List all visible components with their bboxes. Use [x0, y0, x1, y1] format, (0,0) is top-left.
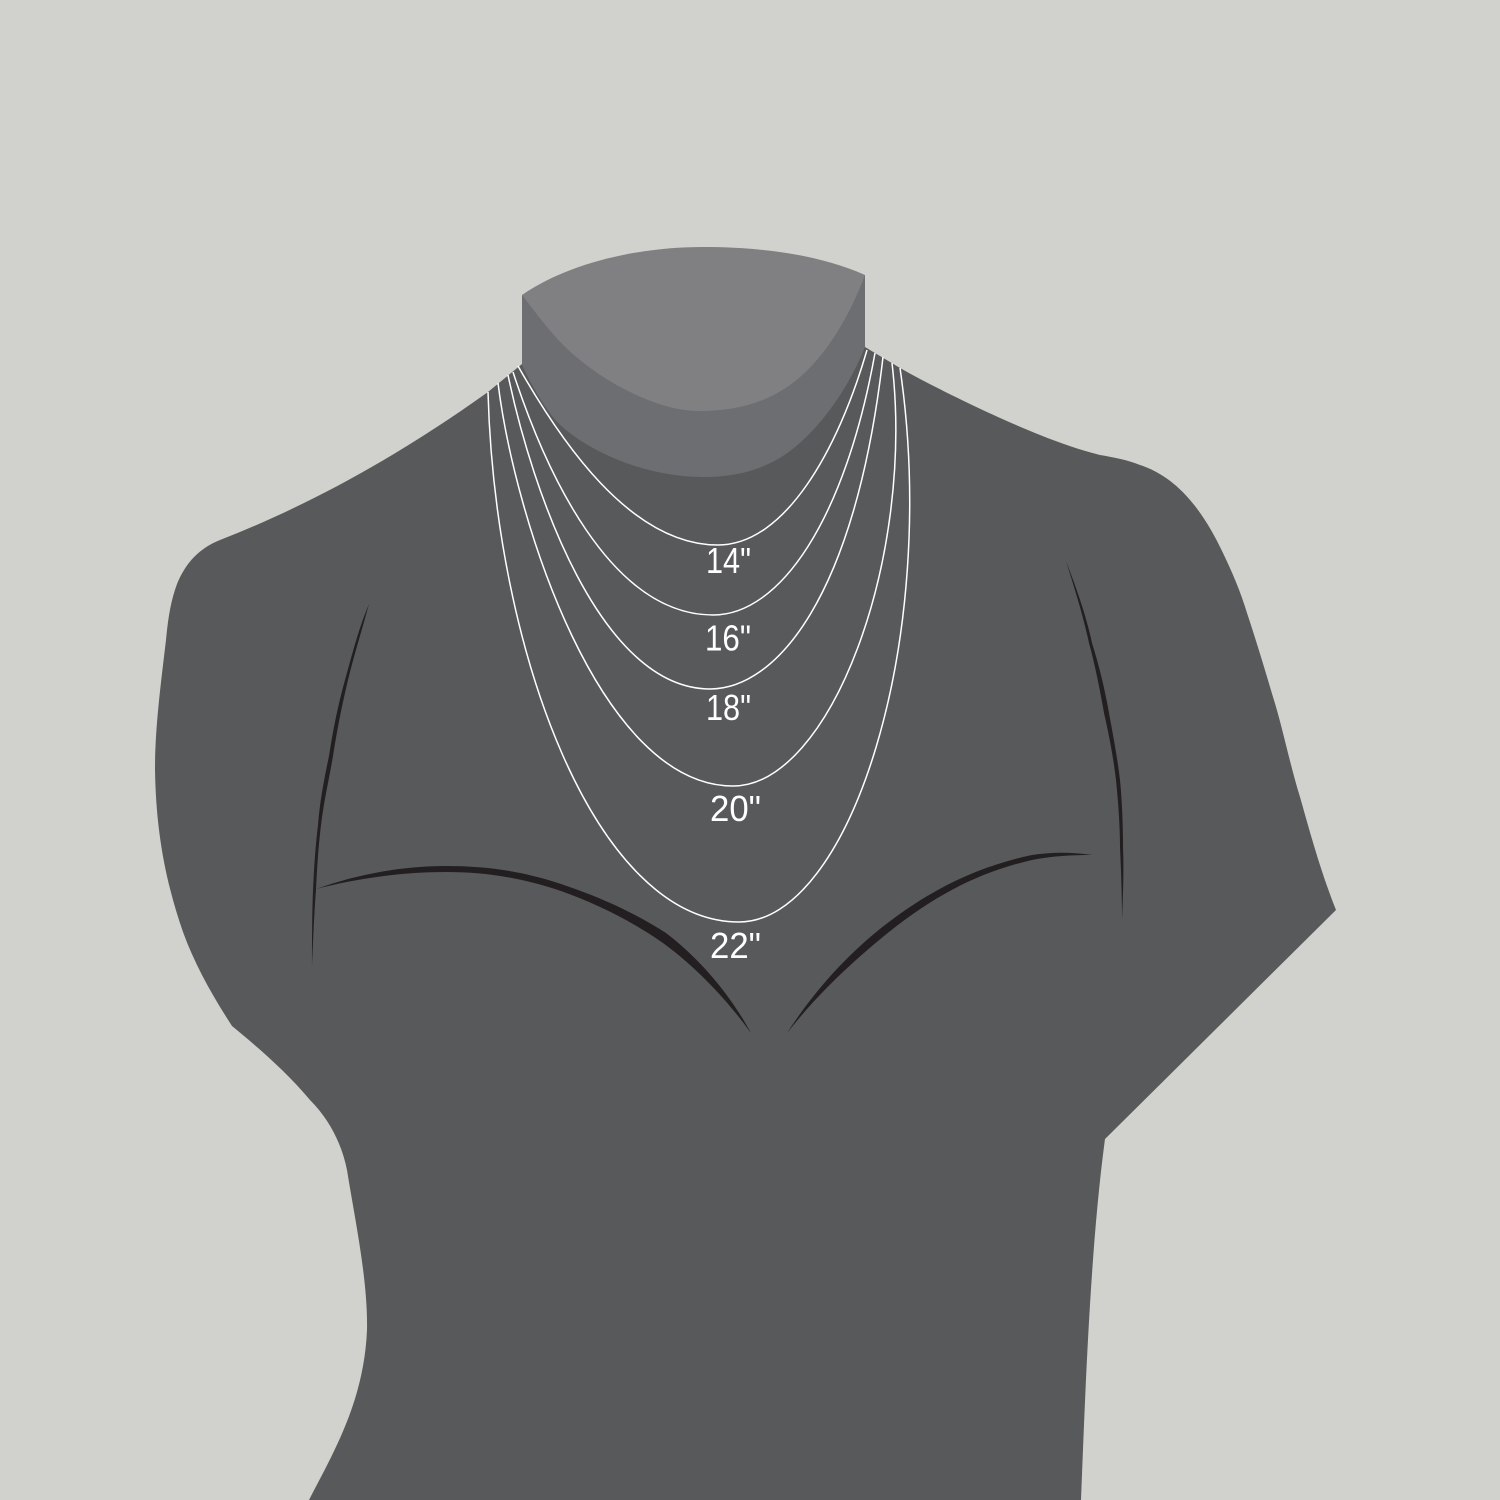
right arm crease — [1066, 561, 1123, 920]
chain: 22 inch — [488, 368, 910, 922]
label: 22 inch: 22" — [710, 925, 761, 966]
neck top — [522, 247, 865, 411]
left chest curve — [316, 866, 751, 1033]
mannequin neck — [522, 275, 865, 477]
body contour lines — [312, 561, 1123, 1033]
chain: 14 inch — [518, 350, 867, 545]
chain: 18 inch — [508, 357, 883, 689]
necklace chains — [488, 350, 910, 922]
label: 20 inch: 20" — [710, 788, 761, 829]
right chest curve — [787, 853, 1092, 1033]
chain: 16 inch — [513, 353, 875, 615]
left arm crease — [312, 604, 369, 966]
chain: 20 inch — [498, 363, 896, 786]
mannequin torso — [155, 347, 1336, 1500]
length labels — [705, 540, 761, 966]
label: 16 inch: 16" — [705, 618, 751, 658]
label: 14 inch: 14" — [706, 540, 751, 581]
label: 18 inch: 18" — [706, 687, 751, 728]
